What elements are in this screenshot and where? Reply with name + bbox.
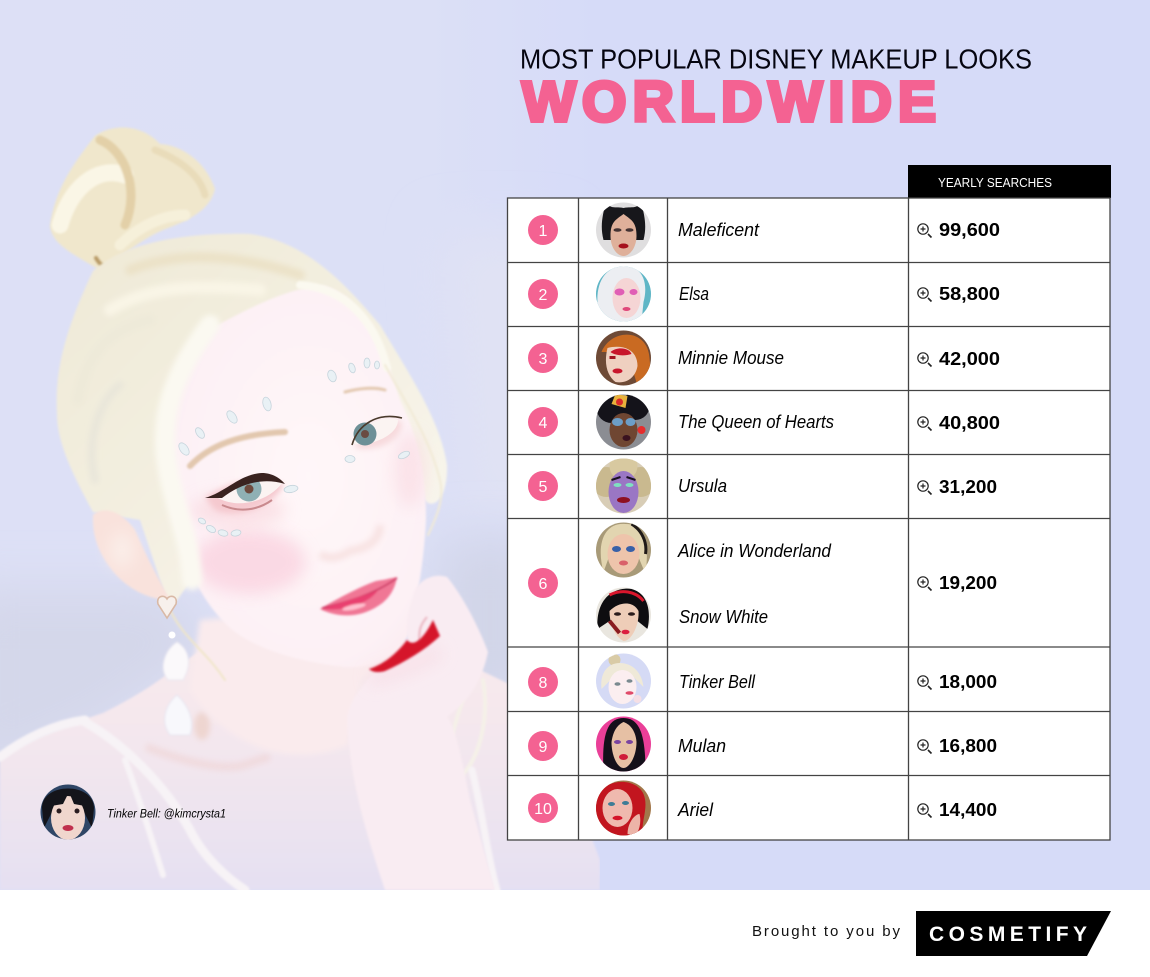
avatar: Mulan <box>596 716 652 772</box>
row 5: Ursula: Ursula <box>678 476 727 496</box>
avatar: Elsa <box>596 266 652 322</box>
lips <box>320 577 397 615</box>
row 4: The Queen of Hearts: 4 <box>539 415 548 432</box>
search icon <box>918 417 928 427</box>
title line one: MOST POPULAR DISNEY MAKEUP LOOKS <box>520 44 1032 74</box>
hair bun <box>50 128 215 270</box>
row 3: Minnie Mouse <box>528 330 1000 386</box>
photo: Tinker Bell makeup look <box>0 126 600 890</box>
row 3: Minnie Mouse: 42,000 <box>939 349 1000 369</box>
row 2: Elsa: Elsa <box>679 284 709 304</box>
row 5: Ursula: 5 <box>539 479 548 496</box>
avatar: Snow White <box>596 587 652 643</box>
avatar: Ariel <box>596 780 652 836</box>
row 5: Ursula <box>528 458 996 514</box>
front hair strands <box>165 285 441 680</box>
table header: yearly searches: YEARLY SEARCHES <box>938 175 1052 190</box>
search icon <box>918 353 928 363</box>
row 10: Ariel: 14,400 <box>939 800 997 820</box>
Cosmetify logo <box>916 911 1111 956</box>
ear <box>93 510 170 600</box>
row 9: Mulan: 9 <box>539 739 548 756</box>
right eye <box>352 416 402 449</box>
footer band <box>0 890 1150 977</box>
search icon <box>918 224 928 234</box>
row 6: Alice in Wonderland and Snow White <box>528 522 997 643</box>
table header: yearly searches <box>908 165 1111 198</box>
hair on head <box>57 234 447 610</box>
row 6: Alice in Wonderland and Snow White: Snow White <box>679 607 768 627</box>
cheek blush <box>194 530 306 594</box>
row 5: Ursula: 31,200 <box>939 477 997 497</box>
row 2: Elsa <box>528 266 1000 322</box>
row 4: The Queen of Hearts: 40,800 <box>939 413 1000 433</box>
row 1: Maleficent: 99,600 <box>939 220 1000 240</box>
table body and grid <box>508 198 1110 840</box>
row 6: Alice in Wonderland and Snow White: Alice in Wonderland <box>677 541 832 561</box>
row 10: Ariel: Ariel <box>677 800 714 820</box>
row 1: Maleficent: Maleficent <box>678 220 760 240</box>
eyebrows <box>190 388 385 466</box>
search icon <box>918 481 928 491</box>
search icon <box>918 288 928 298</box>
Cosmetify logo: COSMETIFY <box>929 923 1087 946</box>
red shadow under chin <box>369 620 440 672</box>
row 9: Mulan <box>528 716 997 772</box>
credit avatar <box>40 784 96 840</box>
row 1: Maleficent <box>528 202 1000 258</box>
row 8: Tinker Bell <box>528 653 997 709</box>
row 6: Alice in Wonderland and Snow White: 19,200 <box>939 573 997 593</box>
row 3: Minnie Mouse: Minnie Mouse <box>678 348 784 368</box>
avatar: Minnie Mouse <box>596 330 652 386</box>
search icon <box>918 577 928 587</box>
shoulders and chest <box>0 640 600 890</box>
row 2: Elsa: 2 <box>539 287 548 304</box>
row 2: Elsa: 58,800 <box>939 284 1000 304</box>
row 8: Tinker Bell: 18,000 <box>939 672 997 692</box>
avatar: Maleficent <box>596 202 652 258</box>
dress straps <box>0 703 500 890</box>
row 10: Ariel: 10 <box>534 801 552 818</box>
title <box>520 44 1032 134</box>
avatar: Ursula <box>596 458 651 514</box>
row 3: Minnie Mouse: 3 <box>539 351 548 368</box>
left eye <box>205 473 285 513</box>
row 4: The Queen of Hearts <box>528 392 1000 450</box>
avatar: Alice in Wonderland <box>596 522 652 578</box>
nose <box>320 525 380 558</box>
title line two: WORLDWIDE <box>522 70 936 134</box>
row 10: Ariel <box>528 780 997 836</box>
credit text: Tinker Bell: @kimcrysta1 <box>107 808 226 820</box>
photo credit <box>40 784 226 840</box>
earring <box>158 596 192 735</box>
row 8: Tinker Bell: 8 <box>539 675 548 692</box>
row 1: Maleficent: 1 <box>539 223 548 240</box>
sponsor text: Brought to you by <box>752 923 900 940</box>
neck <box>194 617 248 654</box>
row 6: Alice in Wonderland and Snow White: 6 <box>539 576 548 593</box>
search icon <box>918 740 928 750</box>
row 8: Tinker Bell: Tinker Bell <box>679 672 756 692</box>
ranking table <box>508 198 1110 840</box>
search icon <box>918 804 928 814</box>
avatar: The Queen of Hearts <box>596 392 652 450</box>
hand and wrist <box>347 576 495 890</box>
search icon <box>918 676 928 686</box>
face <box>164 286 426 667</box>
row 9: Mulan: 16,800 <box>939 736 997 756</box>
face gems <box>177 358 411 537</box>
row 9: Mulan: Mulan <box>678 736 726 756</box>
row 4: The Queen of Hearts: The Queen of Hearts <box>678 412 834 432</box>
avatar: Tinker Bell <box>596 653 652 709</box>
